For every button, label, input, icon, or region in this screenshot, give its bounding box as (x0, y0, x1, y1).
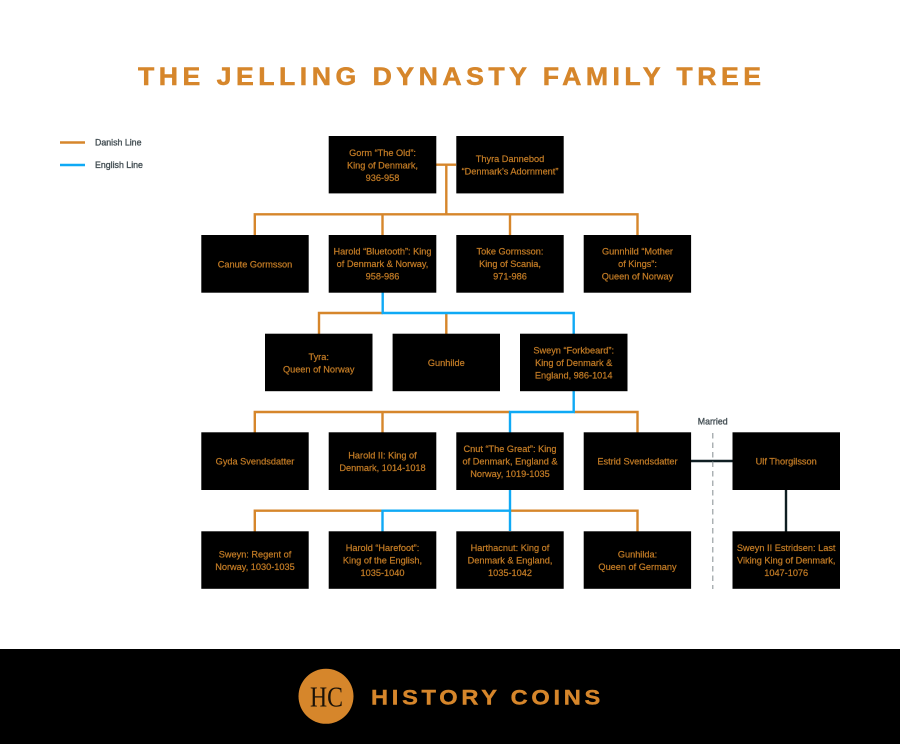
box: Thyra: Thyra Dannebod (476, 154, 544, 164)
box: Sweyn II: Viking King of Denmark, (737, 556, 835, 566)
box: Estrid: Estrid Svendsdatter (597, 457, 678, 467)
box: Tyra (265, 334, 372, 391)
box: Gunnhild: Queen of Norway (602, 272, 674, 282)
box: Harold II: Harold II: King of (348, 450, 417, 460)
box: Harold Harefoot: King of the English, (343, 556, 422, 566)
box: Estrid (584, 432, 691, 490)
footer brand name: HISTORY COINS (371, 686, 604, 710)
box: Harold Bluetooth (329, 235, 436, 293)
box: Gunhilda (584, 531, 691, 589)
box: Gunnhild: of Kings”: (618, 259, 657, 269)
box: Harold Harefoot: Harold “Harefoot”: (346, 543, 419, 553)
box: Gorm: King of Denmark, (347, 160, 418, 170)
married divider: Married (698, 417, 728, 427)
legend: English line: English Line (95, 160, 143, 170)
logo: HC coin (298, 669, 354, 724)
footer (0, 649, 900, 744)
box: Thyra (456, 136, 564, 193)
box: Cnut: Norway, 1019-1035 (470, 469, 550, 479)
legend (60, 138, 143, 170)
box: Harold Bluetooth: of Denmark & Norway, (337, 259, 428, 269)
box: Canute (201, 235, 309, 293)
box: Cnut: Cnut “The Great”: King (464, 444, 556, 454)
box: Sweyn Forkbeard: Sweyn “Forkbeard”: (533, 345, 614, 355)
box: Harthacnut: Harthacnut: King of (471, 543, 550, 553)
box: Gorm (329, 136, 436, 193)
box: Ulf (732, 432, 840, 490)
connector: English line (382, 292, 574, 532)
box: Gyda (201, 432, 309, 490)
box: Sweyn II: Sweyn II Estridsen: Last (737, 543, 836, 553)
box: Cnut (456, 432, 564, 490)
box: Tyra: Tyra: (308, 352, 329, 362)
box: Sweyn Regent (201, 531, 309, 589)
box: Toke: King of Scania, (479, 259, 541, 269)
box: Gorm: Gorm “The Old”: (349, 148, 416, 158)
box: Sweyn Forkbeard: King of Denmark & (535, 358, 612, 368)
box: Harold Bluetooth: Harold “Bluetooth”: King (333, 247, 432, 257)
box: Tyra: Queen of Norway (283, 364, 355, 374)
box: Harthacnut: 1035-1042 (488, 568, 532, 578)
box: Cnut: of Denmark, England & (462, 456, 558, 466)
box: Gunhilde (393, 334, 500, 391)
box: Sweyn II: 1047-1076 (764, 568, 808, 578)
box: Harthacnut (456, 531, 564, 589)
box: Canute: Canute Gormsson (218, 259, 292, 269)
box: Toke: Toke Gormsson: (477, 247, 543, 257)
box: Gunhilde: Gunhilde (428, 358, 465, 368)
box: Gunnhild: Gunnhild “Mother (602, 247, 673, 257)
box: Gunnhild (584, 235, 691, 293)
box: Ulf: Ulf Thorgilsson (756, 457, 817, 467)
box: Thyra: “Denmark’s Adornment” (462, 167, 558, 177)
box: Harold Harefoot (329, 531, 436, 589)
connector: marriage and descendant (691, 461, 786, 532)
connector: Danish line (255, 165, 638, 532)
box: Sweyn Regent: Sweyn: Regent of (219, 549, 292, 559)
box: Sweyn Forkbeard: England, 986-1014 (535, 370, 613, 380)
family tree boxes (201, 136, 840, 589)
box: Gunhilda: Gunhilda: (618, 549, 657, 559)
logo: HC coin: HC (310, 682, 343, 714)
box: Gunhilda: Queen of Germany (598, 562, 677, 572)
box: Harold II: Denmark, 1014-1018 (339, 463, 426, 473)
title: THE JELLING DYNASTY FAMILY TREE (138, 63, 766, 91)
box: Harold Harefoot: 1035-1040 (361, 568, 404, 578)
box: Sweyn II (732, 531, 840, 589)
box: Harthacnut: Denmark & England, (468, 556, 552, 566)
box: Harold II (329, 432, 436, 490)
box: Gyda: Gyda Svendsdatter (216, 457, 294, 467)
box: Toke: 971-986 (493, 272, 527, 282)
box: Harold Bluetooth: 958-986 (366, 272, 399, 282)
box: Gorm: 936-958 (366, 173, 399, 183)
box: Sweyn Regent: Norway, 1030-1035 (215, 562, 295, 572)
box: Toke (456, 235, 564, 293)
box: Sweyn Forkbeard (520, 334, 628, 391)
legend: Danish line: Danish Line (95, 138, 142, 148)
